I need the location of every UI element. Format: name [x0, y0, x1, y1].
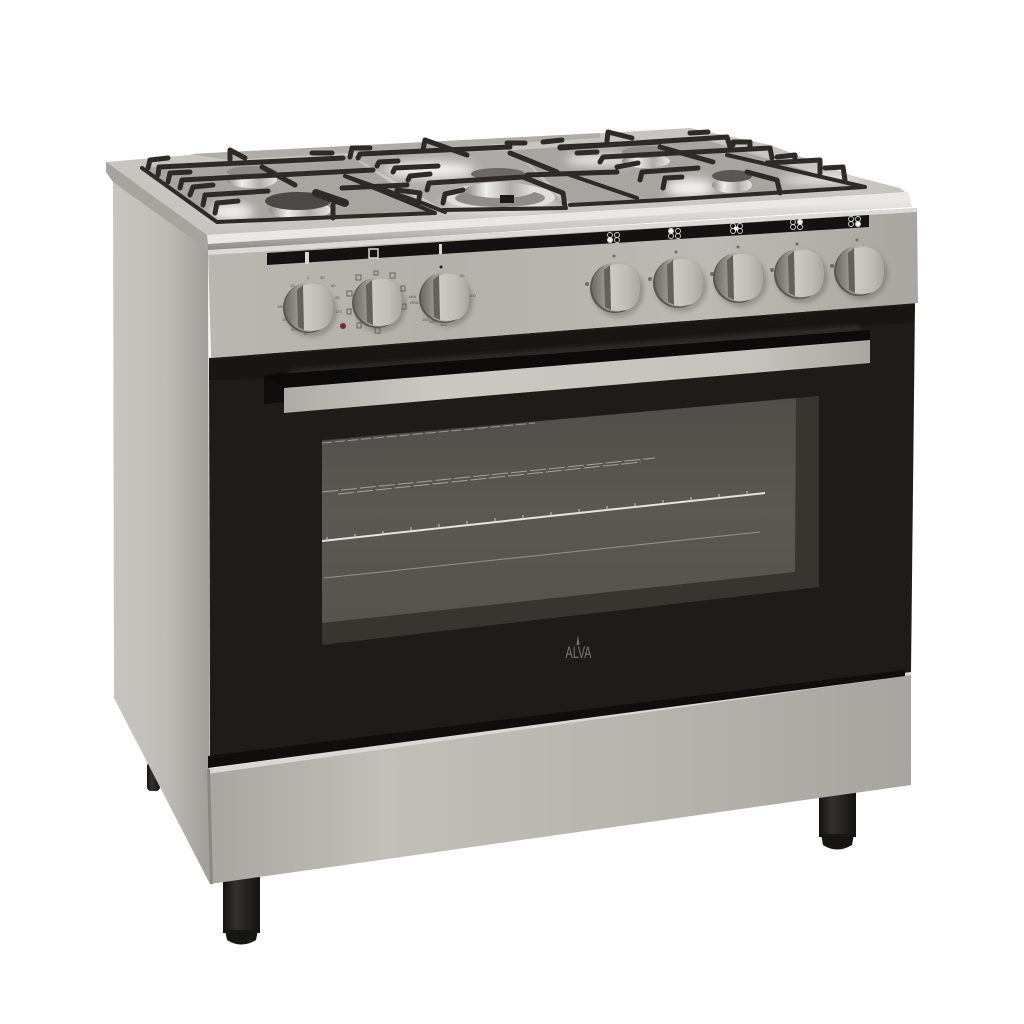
dial scale marks: 150 — [282, 317, 289, 322]
oven shelf rear rails — [322, 458, 655, 494]
rear foot — [147, 762, 160, 791]
hob highlights — [210, 155, 860, 220]
logo: Alva: ALVA — [566, 643, 592, 662]
burner: rear right — [622, 146, 670, 168]
dial scale marks: 50 — [460, 273, 465, 278]
hob front lip — [106, 162, 912, 250]
oven window glass — [322, 398, 796, 623]
front left foot — [223, 875, 260, 944]
knob: function — [352, 278, 406, 332]
dial scale marks: MIN — [409, 294, 416, 299]
oven window frame — [322, 396, 819, 645]
oven door — [208, 303, 915, 768]
pan supports: right — [507, 132, 865, 205]
dial scale marks: 60 — [304, 331, 309, 336]
burner: centre wok — [445, 168, 555, 211]
knob: thermostat — [419, 272, 473, 327]
pan supports: centre — [345, 140, 660, 212]
dial scale marks: 90 — [335, 295, 340, 300]
knob: burner 5 — [834, 246, 888, 300]
dial scale marks: 200 — [429, 319, 436, 324]
dial scale marks: 30 — [320, 275, 325, 280]
burner: front left — [265, 192, 331, 219]
knob: timer — [283, 282, 337, 337]
dial scale marks: 120 — [335, 309, 342, 314]
dial scale marks: 0 — [307, 275, 310, 280]
dial scale marks: 180 — [277, 304, 284, 309]
dial scale marks: 150 — [440, 322, 447, 327]
burner: front right — [712, 170, 752, 193]
strip icons — [305, 216, 860, 264]
knob: burner 1 — [590, 262, 644, 317]
pan supports: left — [142, 150, 435, 222]
knob: burner 2 — [653, 258, 707, 312]
dial scale marks: GRILL — [410, 300, 422, 305]
hob top surface — [106, 128, 912, 250]
burner: rear left — [227, 166, 277, 188]
oven shelf front rail — [322, 491, 765, 541]
dial scale marks — [277, 273, 476, 336]
dial scale marks: 60 — [331, 283, 336, 288]
indicator light — [340, 323, 346, 329]
dial scale marks: 90 — [291, 327, 296, 332]
knob: burner 4 — [774, 248, 828, 303]
control panel — [208, 208, 918, 358]
door handle — [264, 330, 870, 413]
side panel — [113, 180, 210, 884]
dial scale marks: 15 — [290, 283, 295, 288]
knob: burner 3 — [713, 252, 767, 307]
oven lower rail — [324, 532, 760, 578]
front right foot — [819, 785, 856, 850]
dial scale marks: 250 — [422, 317, 429, 322]
logo: Alva — [566, 635, 592, 662]
dial scale marks: 100 — [469, 293, 476, 298]
control panel symbol strip — [267, 215, 869, 265]
plinth drawer — [207, 671, 911, 884]
oven top rail — [322, 423, 535, 443]
